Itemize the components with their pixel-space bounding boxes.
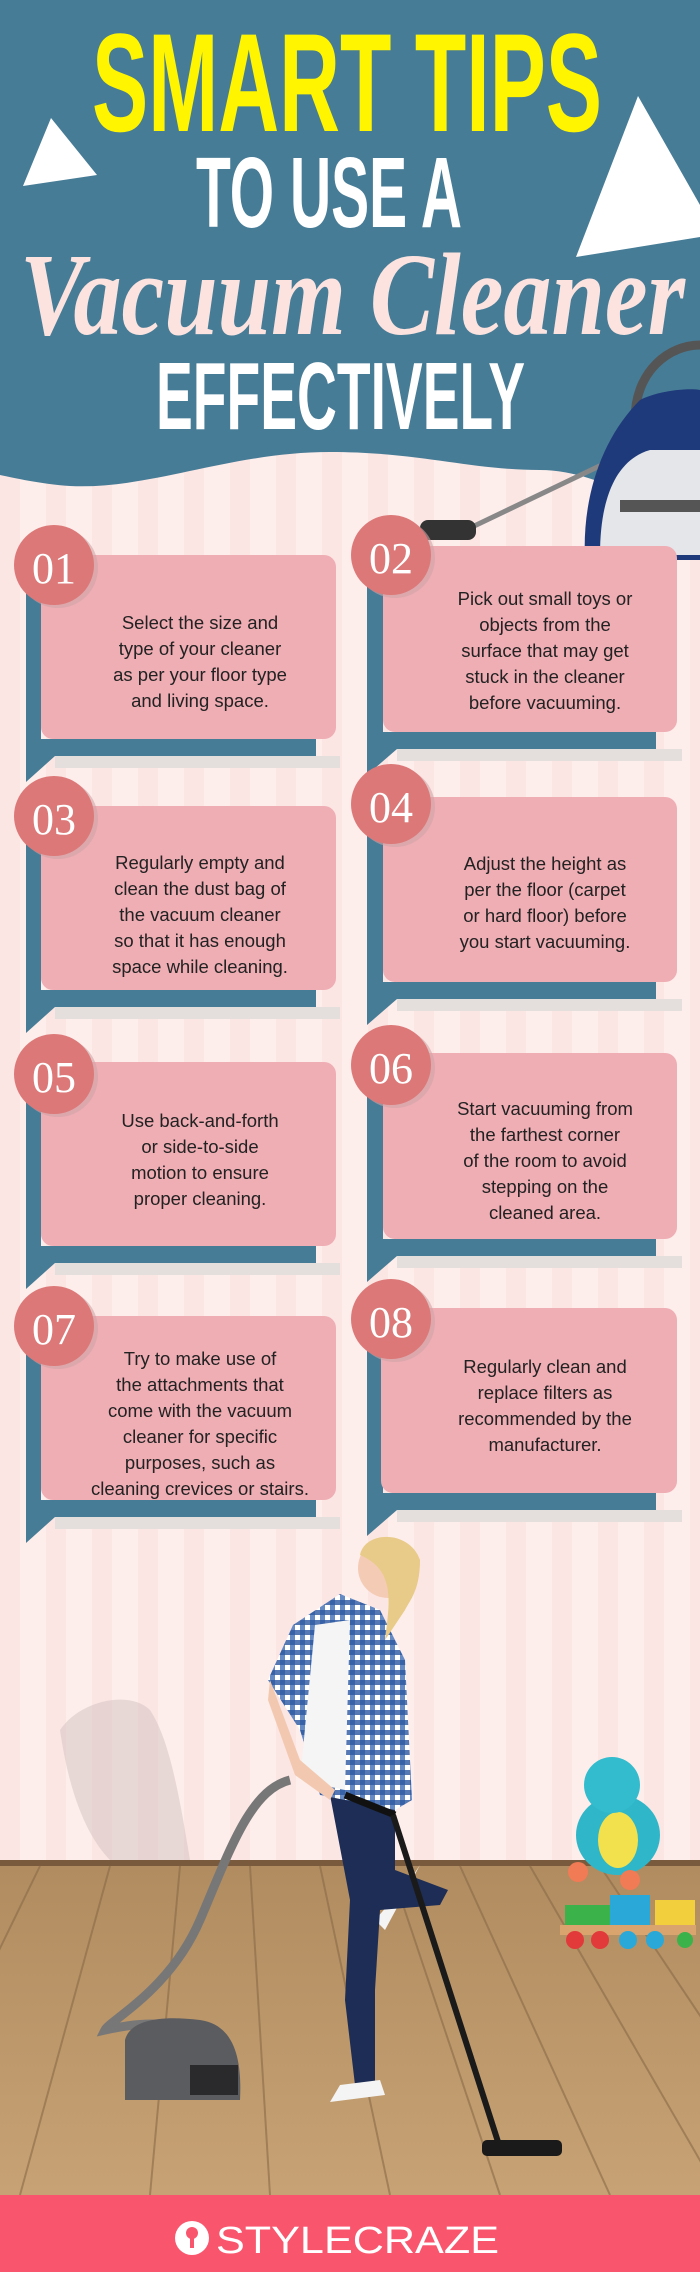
card 08: Regularly clean and [463,1356,627,1377]
card 07 [14,1286,340,1543]
floor [0,1860,700,2195]
card 04: Adjust the height as [464,853,626,874]
title [20,4,686,450]
card 01: Select the size and [122,612,278,633]
card 03 [14,776,340,1033]
card 06: cleaned area. [489,1202,601,1223]
title: TO USE A [196,137,462,249]
card 03: space while cleaning. [112,956,288,977]
card 07: purposes, such as [125,1452,275,1473]
card 08: 08 [369,1298,413,1347]
card 08: manufacturer. [488,1434,602,1455]
card 08: recommended by the [458,1408,632,1429]
card 08 [351,1279,682,1536]
card 04: 04 [369,783,413,832]
decoration: left triangle [23,118,97,186]
card 07: 07 [32,1305,76,1354]
card 04: or hard floor) before [463,905,627,926]
card 01: 01 [32,544,76,593]
card 06 [351,1025,682,1282]
card 05: motion to ensure [131,1162,269,1183]
card 05: proper cleaning. [134,1188,266,1209]
card 04: you start vacuuming. [460,931,630,952]
card 07: the attachments that [116,1374,284,1395]
card 06: 06 [369,1044,413,1093]
illustration: vacuum cleaner top right [420,345,700,560]
card 03: Regularly empty and [115,852,285,873]
card 03: 03 [32,795,76,844]
card 05: Use back-and-forth [121,1110,279,1131]
illustration: woman vacuuming [105,1537,562,2156]
card 07: Try to make use of [124,1348,277,1369]
card 06: stepping on the [482,1176,608,1197]
wall shadow [60,1700,190,1860]
footer: STYLECRAZE [216,2220,499,2262]
header: teal wave background [0,0,700,510]
card 03: so that it has enough [114,930,286,951]
logo icon [175,2221,209,2255]
card 02: Pick out small toys or [458,588,632,609]
card 01: type of your cleaner [119,638,281,659]
card 06: the farthest corner [470,1124,620,1145]
card 03: clean the dust bag of [114,878,287,899]
toy: train [560,1895,696,1949]
card 05 [14,1034,340,1289]
card 07: cleaning crevices or stairs. [91,1478,309,1499]
card 04 [351,764,682,1025]
card 02: objects from the [479,614,611,635]
card 05: or side-to-side [141,1136,259,1157]
card 01: and living space. [131,690,269,711]
card 01 [14,525,340,782]
card 02: surface that may get [461,640,629,661]
footer [0,2195,700,2272]
tip cards [14,515,682,1543]
card 07: cleaner for specific [123,1426,277,1447]
card 02: stuck in the cleaner [465,666,625,687]
card 08: replace filters as [478,1382,612,1403]
card 05: 05 [32,1053,76,1102]
card 06: of the room to avoid [463,1150,627,1171]
card 02: 02 [369,534,413,583]
card 02 [351,515,682,775]
card 02: before vacuuming. [469,692,621,713]
card 06: Start vacuuming from [457,1098,633,1119]
toy: dragon [568,1757,660,1890]
decoration: right triangle [576,96,700,257]
card 04: per the floor (carpet [464,879,626,900]
card 07: come with the vacuum [108,1400,292,1421]
card 03: the vacuum cleaner [119,904,281,925]
card 01: as per your floor type [113,664,287,685]
